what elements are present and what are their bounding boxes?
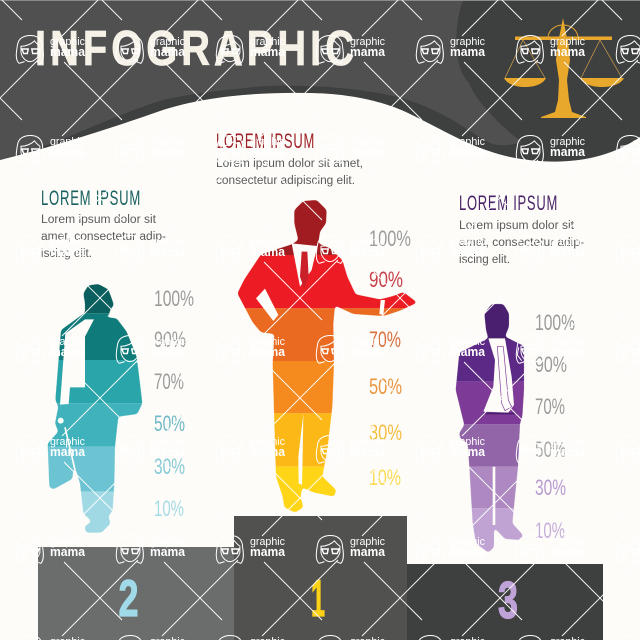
percent scale: right: 90% bbox=[535, 352, 567, 377]
percent scale: center: 100% bbox=[369, 226, 411, 251]
percent scale: left bbox=[154, 286, 194, 521]
text block: center: Lorem ipsum dolor sit amet, bbox=[216, 158, 363, 170]
podium block: third place bbox=[407, 564, 603, 640]
percent scale: right bbox=[535, 310, 575, 543]
podium block: first place bbox=[234, 516, 407, 640]
percent scale: right: 70% bbox=[535, 394, 565, 419]
percent scale: left: 100% bbox=[154, 286, 194, 311]
text block: left: amet, consectetur adip- bbox=[41, 231, 166, 243]
percent scale: right: 10% bbox=[535, 518, 565, 543]
podium block: second place: 2 bbox=[118, 570, 138, 628]
percent scale: right: 30% bbox=[535, 475, 566, 500]
podium bbox=[38, 516, 603, 640]
percent scale: left: 50% bbox=[154, 411, 185, 436]
text block: left: Lorem ipsum dolor sit bbox=[41, 214, 157, 226]
percent scale: left: 70% bbox=[154, 369, 184, 394]
panel: center person bbox=[216, 130, 430, 513]
title: INFOGRAPHIC bbox=[35, 22, 358, 76]
panel: left person bbox=[30, 187, 194, 537]
panel: right person bbox=[456, 196, 584, 552]
percent scale: center: 10% bbox=[369, 465, 401, 490]
percent scale: left: 30% bbox=[154, 454, 185, 479]
podium block: first place: 1 bbox=[311, 570, 325, 628]
text block: right: amet, consectetur adip- bbox=[459, 237, 584, 249]
podium block: third place: 3 bbox=[498, 572, 518, 630]
percent scale: right: 50% bbox=[535, 437, 566, 462]
text block: right bbox=[459, 220, 584, 266]
text block: left: iscing elit. bbox=[41, 248, 92, 260]
text block: right: Lorem ipsum dolor sit bbox=[459, 220, 575, 232]
header wave banner bbox=[0, 0, 640, 162]
podium block: second place bbox=[38, 547, 234, 640]
text block: right: iscing elit. bbox=[459, 254, 510, 266]
text block: center bbox=[216, 158, 363, 187]
figure: red to yellow businessman bbox=[238, 200, 416, 512]
percent scale: center bbox=[369, 226, 411, 490]
percent scale: center: 30% bbox=[369, 420, 402, 445]
heading: center: LOREM IPSUM bbox=[216, 130, 315, 153]
percent scale: center: 50% bbox=[369, 374, 402, 399]
heading: left: LOREM IPSUM bbox=[41, 187, 141, 210]
figure: teal businessman bbox=[48, 284, 142, 533]
icon: justice scales bbox=[504, 18, 624, 118]
text block: left bbox=[41, 214, 166, 260]
percent scale: left: 90% bbox=[154, 327, 186, 352]
percent scale: right: 100% bbox=[535, 310, 575, 335]
text block: center: consectetur adipiscing elit. bbox=[216, 175, 355, 187]
percent scale: center: 70% bbox=[369, 327, 401, 352]
figure: purple businessman bbox=[456, 304, 524, 552]
percent scale: left: 10% bbox=[154, 496, 184, 521]
percent scale: center: 90% bbox=[369, 267, 403, 292]
heading: right: LOREM IPSUM bbox=[459, 192, 558, 215]
